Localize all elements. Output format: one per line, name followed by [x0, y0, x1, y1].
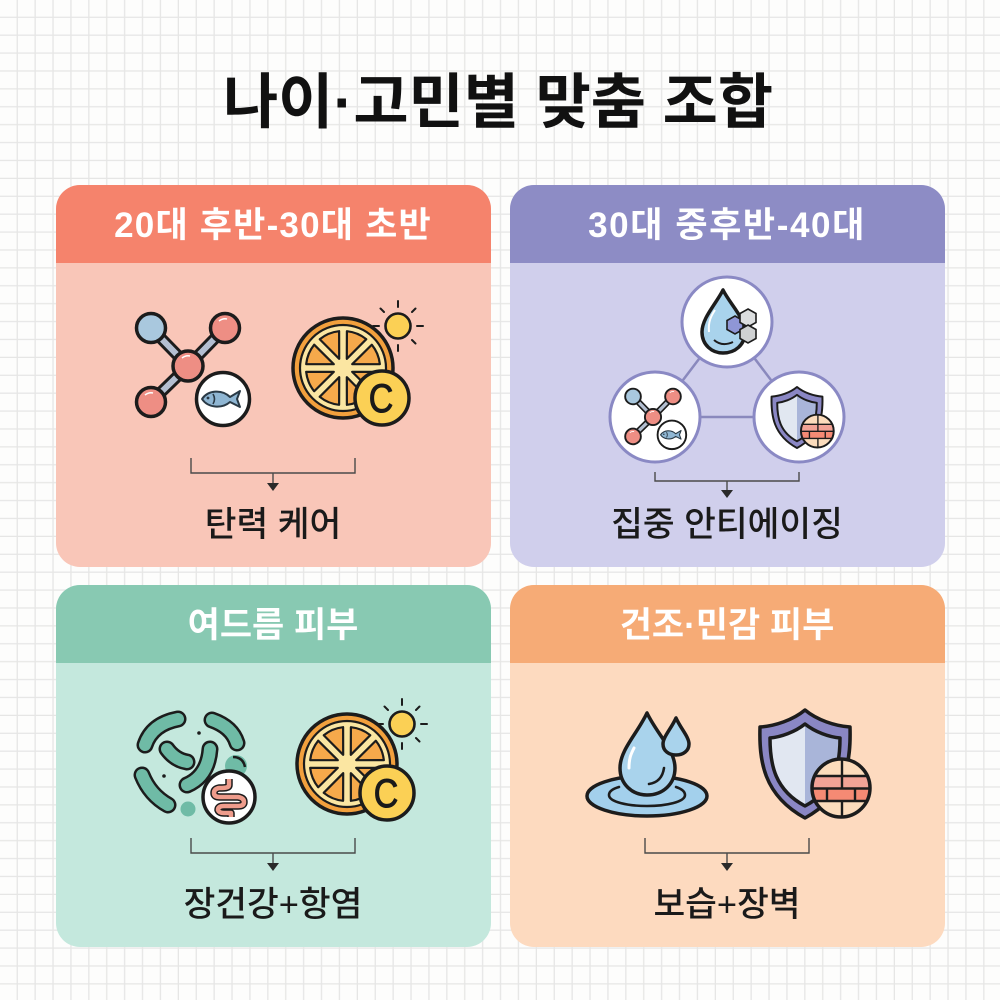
icon: water drops — [587, 713, 707, 816]
bracket arrow — [191, 458, 355, 491]
icon: orange with vitamin C — [293, 301, 423, 425]
triangle connectors — [655, 322, 799, 417]
panel: 20s to early 30s — [56, 185, 491, 567]
icon: barrier shield — [760, 710, 871, 818]
panel: dry and sensitive skin — [510, 585, 945, 947]
header: mid-late 30s to 40s: 30대 중후반-40대 — [588, 206, 866, 245]
result label: 탄력 케어 — [205, 506, 341, 544]
bracket arrow — [645, 838, 809, 871]
icon: orange with vitamin C: C — [374, 770, 398, 816]
icon: orange with vitamin C — [297, 699, 427, 820]
header: dry and sensitive skin: 건조·민감 피부 — [620, 606, 834, 645]
header: mid-late 30s to 40s — [510, 185, 945, 263]
header: 20s to early 30s — [56, 185, 491, 263]
icon: barrier shield circle — [754, 372, 844, 462]
result label: 보습+장벽 — [653, 886, 801, 924]
header: acne skin — [56, 585, 491, 663]
icon: collagen circle — [610, 372, 700, 462]
icon: probiotics with gut — [142, 719, 255, 823]
icon: hyaluronic acid circle — [682, 277, 772, 367]
result label: 집중 안티에이징 — [611, 506, 843, 544]
result label: 장건강+항염 — [184, 886, 362, 924]
panel: mid-late 30s to 40s — [510, 185, 945, 567]
header: 20s to early 30s: 20대 후반-30대 초반 — [114, 206, 432, 245]
title: 나이·고민별 맞춤 조합 — [223, 69, 773, 136]
panel: acne skin — [56, 585, 491, 947]
bracket arrow — [655, 472, 799, 498]
icon: collagen molecule with fish — [136, 314, 250, 426]
bracket arrow — [191, 838, 355, 871]
header: acne skin: 여드름 피부 — [188, 606, 358, 645]
header: dry and sensitive skin — [510, 585, 945, 663]
icon: orange with vitamin C: C — [369, 375, 393, 421]
